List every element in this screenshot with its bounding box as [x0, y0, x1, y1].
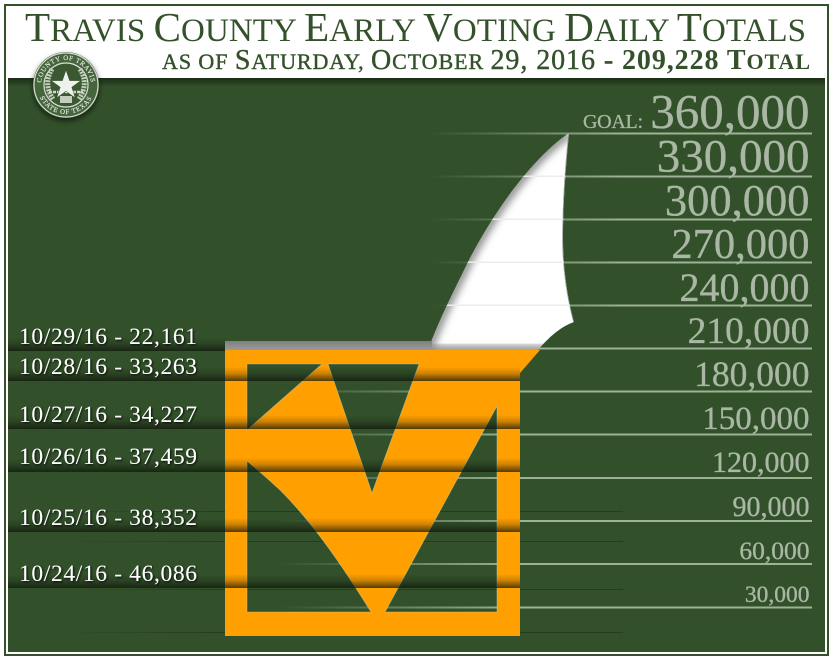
axis value labels: 180,000 — [694, 354, 810, 394]
axis value labels: 240,000 — [680, 265, 810, 310]
county seal: STATE OF TEXAS — [40, 96, 92, 114]
orange check box — [225, 350, 540, 636]
faint dark guide lines — [55, 511, 623, 633]
axis value labels: 330,000 — [657, 130, 810, 182]
daily totals labels: 10/28/16 - 33,263 — [19, 354, 197, 380]
axis value labels: 300,000 — [665, 175, 810, 225]
axis value labels: 60,000 — [739, 536, 810, 565]
title: TRAVIS COUNTY EARLY VOTING DAILY TOTALS — [25, 4, 806, 50]
axis value labels: 90,000 — [732, 492, 810, 523]
axis value labels: 150,000 — [702, 401, 810, 437]
axis value labels: 210,000 — [688, 311, 810, 352]
daily shadow bands — [8, 337, 520, 588]
axis value labels: 30,000 — [745, 582, 810, 608]
header drop shadow — [8, 78, 825, 87]
axis value labels: 270,000 — [671, 221, 810, 268]
county seal: COUNTY OF TRAVIS — [36, 55, 96, 82]
daily totals labels: 10/26/16 - 37,459 — [19, 444, 197, 470]
axis grid lines — [250, 132, 812, 608]
axis value labels — [650, 84, 810, 608]
gray bar: 10/29 remainder — [225, 341, 432, 350]
daily totals labels: 10/29/16 - 22,161 — [19, 324, 197, 350]
subtitle: AS OF SATURDAY, OCTOBER 29, 2016 - 209,228 TOTAL — [162, 45, 810, 76]
daily totals labels — [19, 324, 197, 587]
shark fin: remaining votes to goal — [432, 133, 574, 350]
axis value labels: 360,000 — [650, 84, 810, 139]
daily totals labels: 10/27/16 - 34,227 — [19, 402, 197, 428]
daily totals labels: 10/24/16 - 46,086 — [19, 561, 197, 587]
axis value labels: 120,000 — [712, 446, 810, 479]
daily totals labels: 10/25/16 - 38,352 — [19, 505, 197, 531]
county seal — [30, 50, 102, 124]
goal label: GOAL: — [583, 111, 643, 133]
